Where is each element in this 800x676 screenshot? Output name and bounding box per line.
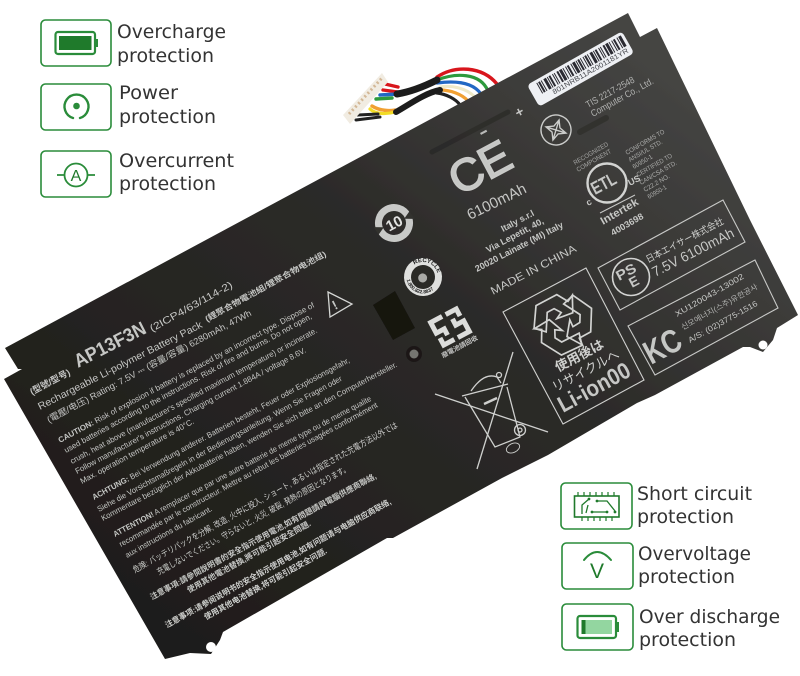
feature: overcharge protection: protection	[117, 45, 214, 67]
recycle box: Li-ion00	[553, 357, 635, 417]
importer address: Italy s.r.l	[499, 208, 536, 234]
japanese warning: 充電しないでください。守らないと, 火災, 破裂, 発熱の原因となります。	[155, 463, 351, 577]
feature: over discharge protection: Over discharge	[639, 606, 780, 628]
importer address: Via Lepetit, 40,	[484, 216, 545, 255]
conformity text	[624, 129, 679, 201]
CE mark: CE	[440, 130, 520, 205]
feature: overvoltage protection: Overvoltage	[638, 543, 751, 565]
model heading	[28, 280, 235, 397]
caution block: CAUTION: Risk of explosion if battery is replaced by an incorrect type. Dispose of	[57, 300, 317, 445]
pack rating lines: (電壓/电压) Rating: 7.5V ⎓ (容量/容量) 6280mAh, 47Wh	[45, 307, 253, 425]
conformity text: C22.2 NO.	[642, 173, 671, 194]
PSE box	[598, 200, 745, 310]
icon: low battery	[562, 604, 633, 650]
PSE box: E	[626, 272, 642, 291]
recycle seal: 1.800.822.8837	[406, 279, 433, 294]
icon: voltage arc: V	[590, 560, 604, 583]
conformity text: CERTIFIED TO	[636, 153, 674, 179]
recycle box	[503, 268, 644, 424]
shadow marks near terminals	[432, 112, 606, 152]
connector wires	[356, 69, 497, 120]
KC box: KC	[637, 321, 688, 371]
attention block: aux instructions du fabricant.	[124, 504, 214, 560]
star seal	[536, 110, 576, 150]
feature: overcurrent protection: Overcurrent	[119, 150, 234, 172]
intertek	[598, 196, 645, 238]
warning triangle: !	[329, 297, 340, 313]
icon: voltage arc	[562, 543, 633, 589]
taiwan recycle logo: 廢電池請回收	[440, 333, 480, 360]
icon: power circle	[41, 84, 111, 130]
ETL mark: US	[626, 173, 642, 188]
feature: overvoltage protection: protection	[638, 566, 735, 588]
recycle box: リサイクルへ	[549, 347, 622, 395]
model heading: (2ICP4/63/114-2)	[148, 280, 235, 335]
feature: short circuit protection: Short circuit	[637, 483, 752, 505]
feature: power protection: Power	[119, 82, 178, 104]
feature: power protection	[41, 82, 216, 130]
PSE box: 日本エイサー株式会社	[644, 215, 726, 266]
intertek: Intertek	[598, 196, 642, 228]
chinese warnings: 使用其他電池替換,將可能引起安全問題.	[185, 518, 312, 595]
made in china: MADE IN CHINA	[489, 243, 579, 298]
PSE box: 7.5V 6100mAh	[649, 225, 737, 280]
feature: short circuit protection: protection	[637, 506, 734, 528]
ETL mark: RECOGNIZED	[572, 141, 610, 167]
achtung block: Siehe die Vorsichtsmaßregeln in der Bedienungsanleitung. Wenn Sie Fragen oder	[96, 374, 344, 514]
10 year seal: 10	[383, 212, 406, 235]
polarity marks: +	[512, 103, 527, 121]
achtung block: Kommentare bezüglich der Akkubatterie haben, wenden Sie sich bitte an den Computerhersteller.	[100, 360, 399, 523]
icon: chasing arrows	[519, 280, 615, 373]
icon: circuit board	[561, 483, 632, 529]
polarity marks	[480, 103, 527, 135]
10 year seal	[369, 200, 419, 246]
capacity: 6100mAh	[464, 180, 529, 224]
warning triangle	[328, 292, 352, 317]
barcode label: 801NRB11A2001181YR	[552, 48, 630, 96]
ETL mark: c	[584, 197, 593, 208]
feature: overcurrent protection: protection	[119, 173, 216, 195]
attention block: recommandée par le constructeur. Mettre au rebut les batteries usagées conformément	[118, 400, 380, 549]
feature: over discharge protection: protection	[639, 629, 736, 651]
barcode label	[527, 31, 634, 107]
icon: full battery	[41, 20, 111, 66]
ETL mark	[572, 141, 642, 213]
model heading: AP13F3N	[71, 318, 150, 372]
pack rating lines: (鋰聚合物電池組/锂聚合物电池组)	[203, 248, 328, 324]
conformity text: 60950-1	[632, 153, 654, 171]
screw	[406, 346, 422, 362]
crossed out bin	[435, 352, 548, 469]
recycle box: 使用後は	[552, 337, 606, 375]
connector plug	[343, 73, 388, 124]
chinese warnings: 注意事项:请参阅说明书的安全指示使用电池,如有问题请与电脑供应商联络,	[163, 496, 393, 630]
recycle seal: RECYCLE	[412, 258, 441, 273]
intertek: 4003698	[609, 211, 645, 238]
conformity text: 60950-1	[646, 184, 668, 201]
caution block: Max. operation temperature is 40°C.	[79, 417, 196, 486]
feature: short circuit protection	[561, 483, 752, 529]
attention block: ATTENTION! A remplacer que par une autre batterie de meme type ou de meme qualite	[112, 394, 373, 539]
model heading: (型號/型号)	[28, 366, 72, 397]
feature: overcharge protection: Overcharge	[117, 21, 226, 43]
feature: overvoltage protection	[562, 543, 751, 589]
icon: ammeter: A	[71, 168, 82, 185]
feature: power protection: protection	[119, 106, 216, 128]
TIS text: Computer Co., Ltd.	[589, 76, 656, 120]
KC box: A/S: (02)3775-1516	[687, 299, 760, 345]
chinese warnings: 使用其他电池替换,将可能引起安全问题.	[202, 546, 329, 622]
feature: overcurrent protection	[41, 150, 234, 197]
mounting hole right	[758, 340, 768, 350]
KC box: 신모에너지(스주)유한공사	[679, 281, 759, 332]
KC box	[628, 260, 778, 375]
ETL mark: COMPONENT	[576, 148, 613, 174]
PSE box: PS	[613, 260, 639, 284]
taiwan recycle logo	[431, 308, 480, 360]
mounting hole left	[206, 642, 216, 652]
feature: overcharge protection	[41, 20, 226, 67]
chinese warnings: 注意事項:請參閱說明書的安全指示使用電池,如有問題請與電腦供應商聯絡,	[148, 471, 378, 602]
pack rating lines: Rechargeable Li-polymer Battery Pack	[36, 319, 205, 413]
caution block: used batteries according to the instructions. Risk of fire and burns. Do not open,	[63, 312, 313, 455]
ETL mark: ETL	[587, 169, 620, 199]
icon: ammeter	[41, 151, 111, 197]
japanese warning: 危険: バッテリパックを分解, 改造, 火中に投入, ショート, あるいは指定された充電方法以外では	[131, 420, 400, 575]
pack rating lines	[36, 248, 328, 425]
KC box: XU120043-13002	[674, 272, 746, 319]
TIS text: TIS 2217-2548	[584, 75, 637, 111]
achtung block: ACHTUNG: Bei Verwendung anderer. Batterien besteht, Feuer oder Explosionsgefahr,	[91, 356, 351, 502]
importer address: 20020 Lainate (MI) Italy	[473, 220, 565, 274]
conformity text: ANSI/UL STD.	[628, 139, 664, 164]
caution block: Follow manufacturer's instructions. Charging current 1.884A / voltage 8.6V.	[74, 346, 308, 476]
caution block: crush, heat above (manufacturer's specified maximum temperature) or incinerate.	[69, 326, 319, 466]
slot	[373, 291, 415, 340]
recycle seal	[404, 258, 442, 296]
conformity text: CAN/CSA STD.	[638, 160, 679, 187]
conformity text: CONFORMS TO	[624, 129, 666, 157]
feature: over discharge protection	[562, 604, 780, 651]
